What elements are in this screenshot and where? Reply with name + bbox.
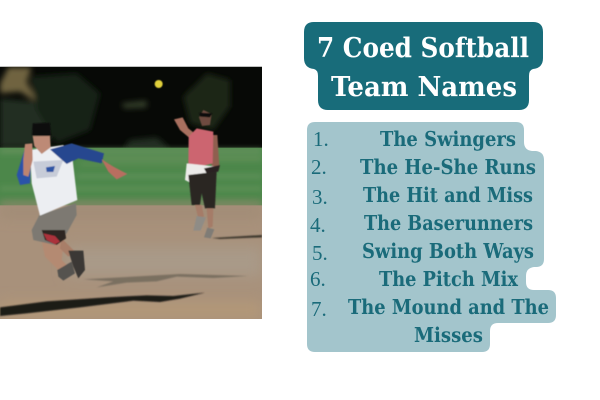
team names: The Baserunners	[364, 211, 533, 235]
field shadows	[0, 235, 262, 316]
photo: softball players on a dirt infield	[0, 67, 262, 319]
throwing player in pink tank top	[174, 110, 220, 238]
numbered list markers: 5.	[312, 241, 328, 265]
head and cap	[33, 136, 51, 154]
numbered list markers: 1.	[313, 127, 329, 151]
list panel of team names	[307, 122, 556, 352]
shorts	[32, 203, 77, 245]
team names: The Mound and The	[348, 295, 549, 319]
team names: Misses	[414, 323, 483, 347]
tree background	[0, 67, 262, 150]
numbered list markers: 7.	[311, 297, 327, 321]
numbered list markers: 3.	[312, 185, 328, 209]
title text: 7 Coed Softball	[317, 33, 529, 64]
sleeves	[50, 143, 104, 164]
grass outfield	[0, 148, 262, 206]
numbered list markers: 6.	[310, 267, 326, 291]
numbered list markers: 2.	[311, 155, 327, 179]
title background shape	[304, 22, 543, 110]
arms and hands	[102, 159, 127, 179]
team names: The Swingers	[380, 127, 516, 151]
legs	[42, 242, 66, 270]
softball	[155, 80, 163, 88]
team names: The Pitch Mix	[379, 267, 519, 291]
runner in blue and white jersey	[17, 123, 127, 281]
team names	[348, 127, 549, 347]
team names: Swing Both Ways	[362, 239, 534, 263]
shirt	[30, 145, 77, 216]
dirt infield	[0, 205, 262, 319]
numbered list markers	[310, 127, 329, 321]
title banner	[304, 22, 543, 110]
title text	[317, 33, 529, 103]
title text: Team Names	[331, 72, 517, 103]
team names: The Hit and Miss	[363, 183, 533, 207]
numbered list markers: 4.	[310, 213, 326, 237]
team names: The He-She Runs	[360, 155, 536, 179]
shoes	[68, 251, 85, 278]
list background shape	[307, 122, 556, 352]
